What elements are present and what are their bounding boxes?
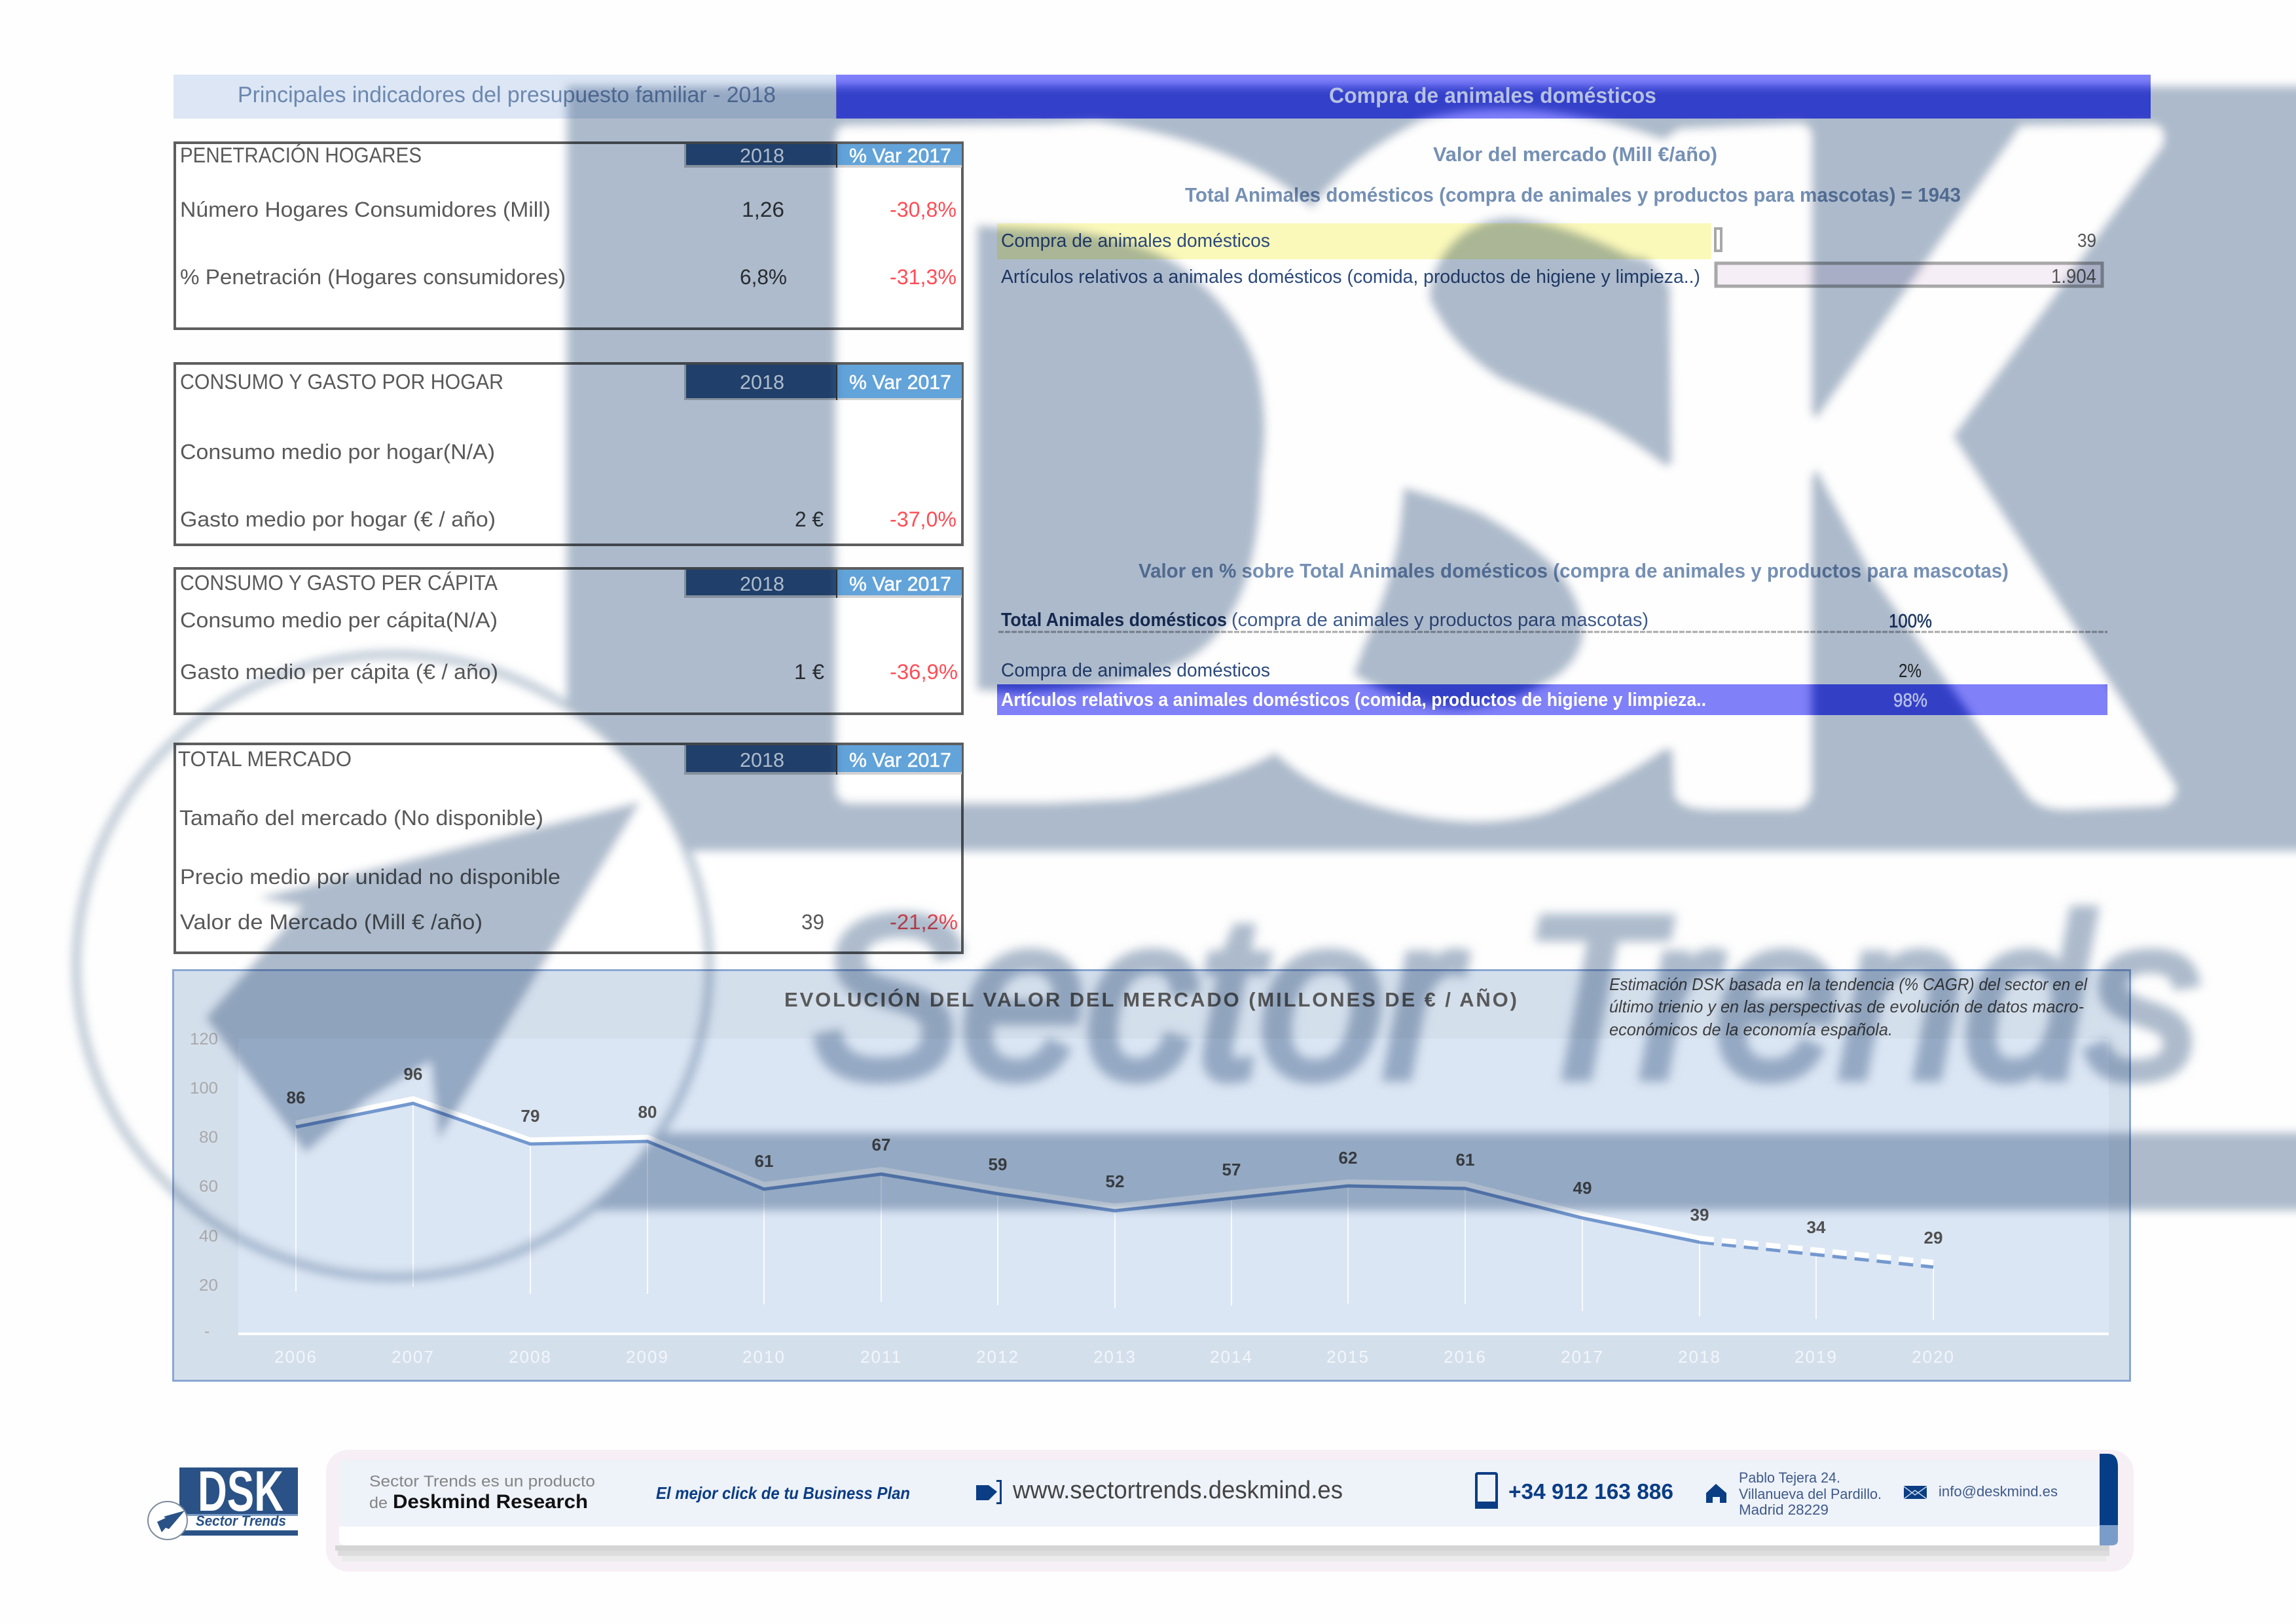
panel: consumo y gasto per cápita: Consumo medio per cápita(N/A): [180, 608, 498, 632]
footer: address: [1739, 1469, 1882, 1518]
panel: consumo y gasto per cápita: % Var 2017: [849, 572, 951, 595]
x axis labels: 2010: [742, 1347, 786, 1367]
data labels: 34: [1807, 1217, 1826, 1237]
data labels: 61: [1456, 1150, 1474, 1170]
chart note: Estimación DSK basada en la tendencia (% CAGR) del sector en el: [1609, 974, 2088, 994]
heading: valor en porcentaje: Valor en % sobre Total Animales domésticos (compra de animales y productos para mascotas): [1139, 559, 2009, 582]
heading: valor del mercado: Valor del mercado (Mill €/año): [1433, 143, 1717, 166]
header bar: product: [836, 75, 2151, 119]
data labels: 59: [989, 1154, 1007, 1174]
footer: email: info@deskmind.es: [1939, 1483, 2058, 1500]
table row: total animales 100%: [998, 610, 2107, 632]
chart title: EVOLUCIÓN DEL VALOR DEL MERCADO (MILLONES DE € / AÑO): [784, 987, 1517, 1011]
panel: consumo y gasto per cápita: CONSUMO Y GASTO PER CÁPITA: [180, 571, 498, 595]
panel: penetración hogares: Número Hogares Consumidores (Mill): [180, 198, 551, 221]
data labels: 96: [404, 1064, 422, 1084]
bar row: compra de animales: [997, 223, 2096, 259]
panel: consumo y gasto per cápita: Gasto medio per cápita (€ / año): [180, 660, 498, 684]
footer band: [326, 1450, 2134, 1572]
bar row: artículos relativos: [1001, 263, 2102, 287]
panel: penetración hogares: 6,8%: [740, 265, 787, 289]
panel: total mercado: 2018: [740, 748, 784, 771]
panel: penetración hogares: -30,8%: [890, 198, 957, 221]
y axis labels: 120: [190, 1030, 218, 1048]
data labels: 67: [872, 1135, 890, 1154]
bar row: artículos relativos: Artículos relativos a animales domésticos (comida, productos de higiene y limpieza..): [1001, 267, 1700, 287]
y axis labels: 20: [199, 1276, 218, 1295]
panel: consumo y gasto por hogar: -37,0%: [890, 507, 957, 531]
panel: total mercado: -21,2%: [890, 910, 958, 934]
chart note: [1609, 974, 2088, 1039]
panel: total mercado: % Var 2017: [849, 748, 951, 771]
data labels: 80: [638, 1102, 657, 1122]
bar row: compra de animales: Compra de animales domésticos: [1001, 231, 1270, 251]
panel: penetración hogares: -31,3%: [890, 265, 957, 289]
x axis labels: [274, 1347, 1955, 1367]
panel: line chart: [173, 970, 2130, 1380]
footer: product line: de: [369, 1494, 388, 1512]
table row: total animales 100%: (compra de animales y productos para mascotas): [1231, 610, 1649, 631]
icon: web arrow: [976, 1480, 1002, 1504]
footer: address: Villanueva del Pardillo.: [1739, 1486, 1882, 1502]
panel: total mercado: 39: [801, 910, 824, 934]
data labels: 52: [1106, 1172, 1124, 1191]
table row: total animales 100%: Total Animales domésticos: [1001, 610, 1227, 631]
header: principal indicators: Principales indicadores del presupuesto familiar - 2018: [238, 83, 776, 107]
panel: penetración hogares: % Var 2017: [849, 144, 951, 167]
panel: consumo y gasto por hogar: 2 €: [795, 507, 824, 531]
panel: consumo y gasto per cápita: 1 €: [794, 660, 824, 684]
data labels: 86: [287, 1088, 305, 1107]
chart note: económicos de la economía española.: [1609, 1020, 1893, 1039]
x axis labels: 2017: [1561, 1347, 1604, 1367]
x axis labels: 2007: [392, 1347, 435, 1367]
icon: envelope: [1904, 1486, 1927, 1499]
table row: total animales 100%: 100%: [1889, 611, 1932, 632]
row text: artículos 98%: 98%: [1893, 690, 1927, 711]
y axis labels: 100: [190, 1079, 218, 1098]
row text: artículos 98%: Artículos relativos a animales domésticos (comida, productos de higiene y limpieza..: [1001, 690, 1706, 710]
chart note: último trienio y en las perspectivas de evolución de datos macro-: [1609, 997, 2084, 1016]
footer: product line: Deskmind Research: [393, 1491, 588, 1513]
line series: market value: [296, 1099, 1933, 1267]
header title: product: Compra de animales domésticos: [1329, 83, 1656, 107]
panel: total mercado: Valor de Mercado (Mill € /año): [180, 910, 483, 934]
panel: consumo y gasto por hogar: % Var 2017: [849, 371, 951, 394]
panel: penetración hogares: PENETRACIÓN HOGARES: [180, 143, 422, 167]
icon: house: [1706, 1484, 1726, 1503]
data labels: [287, 1064, 1942, 1247]
x axis labels: 2011: [860, 1347, 902, 1367]
data labels: 61: [755, 1151, 773, 1171]
data labels: 57: [1222, 1160, 1241, 1179]
data labels: 29: [1924, 1228, 1942, 1247]
footer: product line: Sector Trends es un producto: [369, 1473, 595, 1490]
panel: consumo y gasto por hogar: Gasto medio por hogar (€ / año): [180, 507, 496, 531]
logo: DSK Sector Trends: Sector Trends: [196, 1513, 286, 1529]
table row: compra 2%: [1001, 660, 1922, 682]
x axis labels: 2009: [626, 1347, 669, 1367]
data labels: 39: [1690, 1205, 1709, 1225]
footer: product line: [369, 1473, 595, 1513]
data labels: 79: [521, 1106, 539, 1126]
panel: total mercado: [175, 744, 962, 953]
x axis labels: 2006: [274, 1347, 318, 1367]
logo: DSK Sector Trends: [148, 1460, 298, 1540]
panel: total mercado: Tamaño del mercado (No disponible): [179, 806, 543, 830]
panel: penetración hogares: 2018: [740, 144, 784, 167]
heading: total animales domésticos: Total Animales domésticos (compra de animales y productos para mascotas) = 1943: [1185, 183, 1961, 206]
header: principal indicators: [173, 75, 836, 119]
panel: consumo y gasto por hogar: [175, 363, 962, 545]
x axis labels: 2016: [1444, 1347, 1487, 1367]
bar row: compra de animales: 39: [2077, 231, 2096, 251]
data labels: 62: [1339, 1148, 1357, 1168]
footer: address: Pablo Tejera 24.: [1739, 1469, 1840, 1486]
table row: compra 2%: Compra de animales domésticos: [1001, 660, 1270, 681]
footer: slogan: El mejor click de tu Business Plan: [656, 1483, 910, 1503]
footer: website: www.sectortrends.deskmind.es: [1012, 1477, 1343, 1504]
panel: penetración hogares: [175, 143, 962, 329]
x axis labels: 2008: [509, 1347, 552, 1367]
y axis labels: -: [204, 1322, 210, 1340]
table row background: artículos 98%: [997, 684, 2107, 715]
panel: consumo y gasto por hogar: 2018: [740, 371, 784, 394]
panel: penetración hogares: 1,26: [742, 198, 784, 221]
footer: phone number: +34 912 163 886: [1508, 1479, 1673, 1504]
x axis labels: 2014: [1210, 1347, 1253, 1367]
watermark: DSK Sector Trends logo: Sector Trends: [812, 870, 2200, 1126]
panel: penetración hogares: % Penetración (Hogares consumidores): [180, 265, 566, 289]
y axis labels: 40: [199, 1227, 218, 1246]
y axis labels: 60: [199, 1177, 218, 1196]
x axis labels: 2018: [1678, 1347, 1721, 1367]
x axis labels: 2015: [1326, 1347, 1370, 1367]
y axis labels: 80: [199, 1128, 218, 1147]
table row: compra 2%: 2%: [1899, 661, 1922, 682]
panel: consumo y gasto per cápita: -36,9%: [890, 660, 958, 684]
logo: DSK Sector Trends: DSK: [198, 1460, 283, 1523]
bar row: artículos relativos: 1.904: [2051, 265, 2096, 287]
footer: address: Madrid 28229: [1739, 1502, 1829, 1518]
y axis labels: [190, 1030, 218, 1340]
x axis labels: 2019: [1795, 1347, 1838, 1367]
data labels: 49: [1573, 1178, 1592, 1198]
panel: consumo y gasto por hogar: CONSUMO Y GASTO POR HOGAR: [180, 370, 503, 394]
panel: total mercado: TOTAL MERCADO: [178, 747, 352, 771]
icon: phone: [1475, 1473, 1498, 1509]
x axis labels: 2012: [976, 1347, 1019, 1367]
drop lines: [296, 1103, 1933, 1320]
panel: consumo y gasto per cápita: [175, 568, 962, 714]
panel: consumo y gasto por hogar: Consumo medio por hogar(N/A): [180, 440, 495, 464]
watermark: DSK Sector Trends logo: [77, 86, 2296, 1277]
x axis labels: 2020: [1912, 1347, 1955, 1367]
panel: total mercado: Precio medio por unidad no disponible: [180, 865, 560, 889]
panel: consumo y gasto per cápita: 2018: [740, 572, 784, 595]
x axis labels: 2013: [1093, 1347, 1137, 1367]
